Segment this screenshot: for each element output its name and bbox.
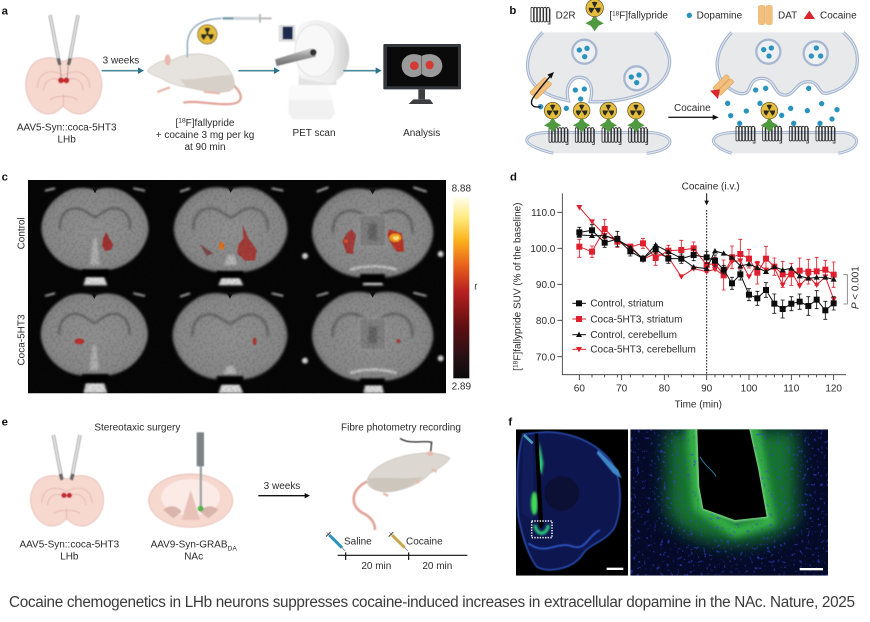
row labels: Coca-5HT3 — [16, 314, 27, 366]
chart legend — [572, 299, 696, 356]
label d: d — [510, 172, 517, 184]
vesicles — [756, 40, 828, 65]
mouse with fibre cable — [354, 438, 450, 530]
arrow: 3 weeks: 3 weeks — [264, 481, 300, 492]
x tick labels: 60 — [574, 384, 585, 395]
panel c: PET t-maps — [2, 172, 477, 393]
DAT transporter with reuptake arrow — [529, 72, 554, 107]
chart legend: Control, striatum — [590, 299, 664, 310]
chart legend: Control, cerebellum — [590, 330, 677, 341]
rat caption: + cocaine 3 mg per kg — [156, 130, 254, 141]
brain caption: AAV5-Syn::coca-5HT3 — [17, 122, 117, 133]
y tick labels: 70.0 — [536, 352, 556, 363]
magnified micrograph — [630, 429, 828, 576]
x tick labels: 70 — [616, 384, 628, 395]
receptors and bound ligands — [544, 102, 648, 144]
x axis title: Time (min) — [675, 399, 722, 410]
panel a: PET experiment workflow — [2, 5, 461, 153]
series: Control cerebellum — [576, 232, 837, 282]
x tick labels: 120 — [825, 384, 842, 395]
y tick labels — [530, 208, 556, 363]
NAc caption: NAc — [184, 552, 203, 563]
NAc caption: AAV9-Syn-GRAB — [151, 540, 228, 551]
series: Coca-5HT3 striatum — [576, 219, 837, 290]
scale bar — [800, 568, 823, 570]
rat caption: F]fallypride — [186, 118, 235, 129]
series: Coca-5HT3 cerebellum — [576, 205, 837, 302]
label e: e — [2, 416, 8, 428]
y tick labels: 90.0 — [536, 280, 556, 291]
panel e: fibre photometry workflow — [2, 416, 467, 572]
colour scale: 8.88 — [452, 183, 471, 194]
left postsynaptic terminal — [527, 132, 670, 153]
injection timeline — [326, 532, 467, 572]
injection timeline: 20 min — [422, 561, 452, 572]
rat caption: at 90 min — [184, 142, 226, 153]
rat caption: [ — [175, 118, 178, 129]
arrow: 3 weeks — [258, 481, 310, 498]
significance bracket — [843, 266, 861, 309]
left synapse — [527, 32, 670, 153]
heading: stereotaxic surgery: Stereotaxic surgery — [94, 423, 180, 434]
arrow: 3 weeks — [102, 55, 144, 74]
scanner and analysis captions: PET scan — [292, 128, 336, 139]
colour scale: t — [474, 281, 477, 292]
panel b: synapse diagrams — [509, 0, 857, 153]
structural brain slices — [41, 186, 444, 393]
arrow to scanner — [238, 67, 280, 74]
LHb caption: LHb — [60, 552, 79, 563]
brain image grid — [28, 180, 446, 393]
significance bracket: P < 0.001 — [850, 266, 861, 309]
colour scale: 2.89 — [452, 382, 471, 393]
y tick labels: 100.0 — [530, 244, 556, 255]
x tick labels: 100 — [741, 384, 758, 395]
left presynaptic terminal — [528, 32, 670, 102]
rat with injection line and radiation icon — [147, 14, 272, 104]
x tick labels: 110 — [783, 384, 800, 395]
scanner and analysis captions — [292, 128, 440, 139]
row labels: Control — [16, 217, 27, 249]
arrow: cocaine — [668, 103, 719, 120]
right synapse — [710, 32, 857, 153]
rat caption: 18 — [178, 118, 186, 125]
panel d: SUV time course chart — [510, 172, 861, 410]
heading: fibre photometry: Fibre photometry recording — [341, 423, 461, 434]
legend: D2R — [556, 11, 576, 22]
vesicles — [572, 40, 648, 90]
LHb caption: AAV5-Syn::coca-5HT3 — [19, 540, 119, 551]
NAc brain with fibre — [149, 432, 233, 527]
chart legend: Coca-5HT3, striatum — [590, 314, 682, 325]
legend: Cocaine — [820, 11, 857, 22]
LHb brain with syringes — [31, 435, 104, 526]
arrow: cocaine: Cocaine — [674, 103, 711, 114]
arrow: 3 weeks: 3 weeks — [103, 55, 139, 66]
receptors and single bound ligand — [736, 102, 835, 143]
right postsynaptic terminal — [713, 132, 857, 153]
scale bar — [607, 568, 623, 570]
x tick labels: 80 — [659, 384, 670, 395]
legend — [531, 0, 857, 31]
y axis title: [ — [513, 368, 524, 371]
brain with bilateral syringes — [26, 15, 102, 114]
scanner and analysis captions: Analysis — [403, 128, 440, 139]
whole hemisphere micrograph — [516, 429, 628, 576]
chart legend: Coca-5HT3, cerebellum — [590, 345, 696, 356]
monitor with brain — [383, 44, 461, 104]
axes — [557, 193, 846, 380]
x tick labels: 90 — [701, 384, 713, 395]
x tick labels — [574, 384, 842, 395]
label c: c — [2, 172, 8, 184]
series: Control striatum — [576, 225, 837, 319]
legend: F]fallypride — [619, 11, 668, 22]
y tick labels: 80.0 — [536, 316, 556, 327]
saline syringe — [326, 532, 345, 551]
legend: 18 — [612, 10, 620, 17]
panel f: fluorescence micrographs — [508, 416, 828, 576]
activation overlays — [74, 225, 404, 345]
label b: b — [509, 5, 516, 17]
y axis title: F]fallypride SUV (% of the baseline) — [513, 202, 524, 361]
brain caption: LHb — [58, 134, 76, 145]
row labels — [16, 217, 27, 366]
legend: [ — [609, 11, 612, 22]
injection timeline: Saline — [344, 536, 372, 547]
cocaine syringe — [389, 532, 408, 551]
NAc caption: DA — [228, 545, 237, 552]
colour scale — [452, 183, 477, 393]
dopamine dots — [538, 46, 642, 111]
right presynaptic terminal — [717, 32, 857, 95]
y tick labels: 110.0 — [531, 208, 556, 219]
legend: DAT — [778, 11, 797, 22]
y axis title: 18 — [512, 360, 519, 368]
label f: f — [508, 416, 512, 428]
arrow to analysis — [343, 67, 382, 74]
dopamine dots — [725, 45, 840, 126]
blocked DAT with cocaine — [710, 74, 734, 99]
cocaine marker: Cocaine (i.v.) — [682, 181, 740, 192]
caption: Cocaine chemogenetics in LHb neurons suppresses cocaine-induced increases in extracellular dopamine in the NAc. Nature, 2025 — [9, 594, 855, 611]
label a: a — [2, 5, 9, 17]
cocaine marker — [682, 181, 740, 375]
PET scanner — [275, 20, 349, 119]
dotted inset box — [532, 521, 552, 538]
legend: Dopamine — [697, 11, 743, 22]
injection timeline: 20 min — [361, 561, 391, 572]
injection timeline: Cocaine — [406, 536, 443, 547]
